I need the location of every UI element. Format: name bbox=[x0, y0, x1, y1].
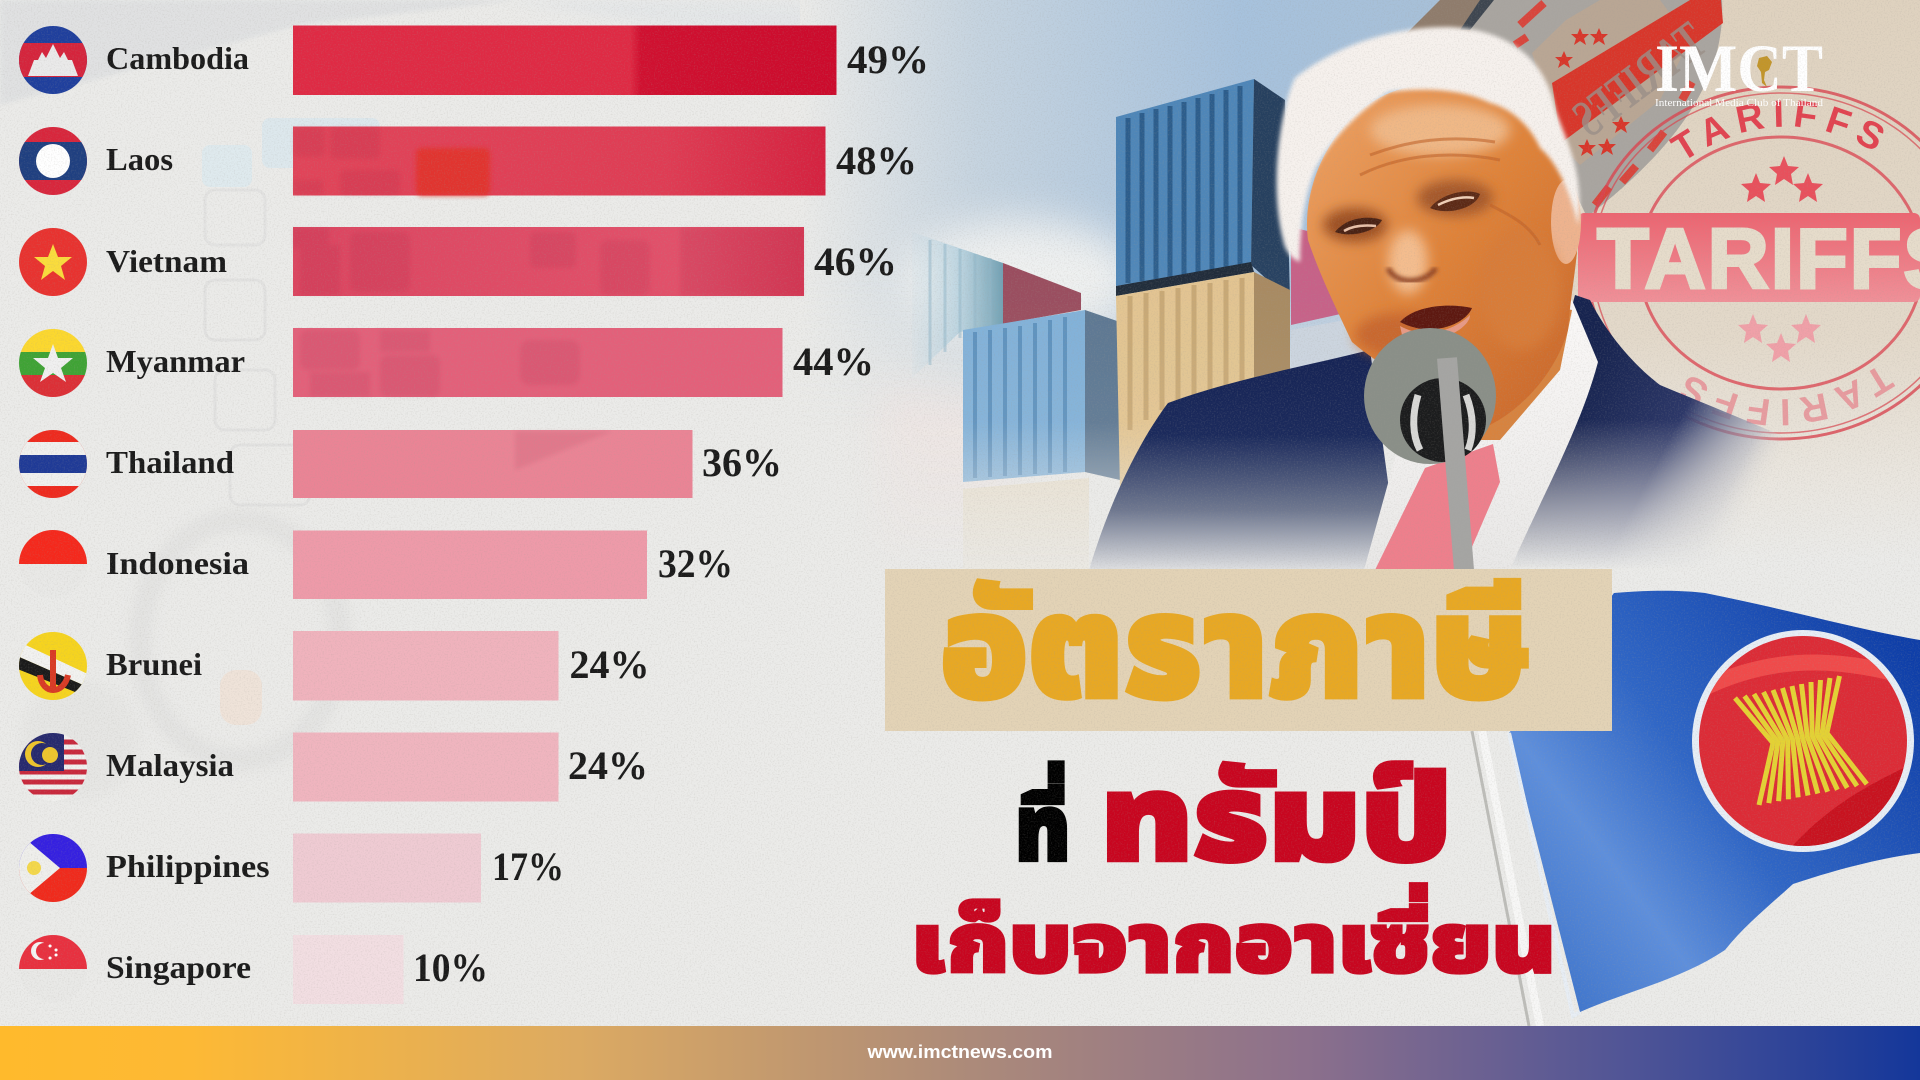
row: Cambodia bbox=[19, 26, 929, 94]
bar: Thailand 36% bbox=[293, 430, 692, 498]
row: Indonesia: Indonesia bbox=[106, 545, 249, 581]
bar: Brunei 24% bbox=[293, 631, 558, 700]
row: Vietnam bbox=[19, 228, 897, 296]
stamp stars bbox=[1555, 28, 1630, 156]
flag pole bbox=[1472, 731, 1540, 1026]
neck bbox=[1360, 290, 1572, 440]
row: Brunei: 24% bbox=[570, 642, 650, 687]
logo Thailand map icon bbox=[1757, 56, 1772, 87]
row: Vietnam: 46% bbox=[814, 239, 897, 284]
bar: Myanmar 44% bbox=[293, 328, 782, 397]
headline line 3: เก็บจากอาเซี่ยน bbox=[911, 883, 1556, 990]
bar: Singapore 10% bbox=[293, 935, 404, 1004]
forehead wrinkles bbox=[1360, 139, 1540, 245]
row: Laos: 48% bbox=[836, 138, 917, 183]
microphone bbox=[1364, 328, 1496, 570]
row: Myanmar: Myanmar bbox=[106, 343, 245, 379]
headline line 2 bbox=[1015, 750, 1452, 886]
bar: Indonesia 32% bbox=[293, 530, 647, 599]
row: Philippines bbox=[15, 830, 564, 906]
row: Indonesia: 32% bbox=[658, 541, 733, 586]
pink container behind bbox=[1291, 229, 1339, 325]
row: Myanmar: 44% bbox=[793, 339, 874, 384]
row: Thailand bbox=[19, 430, 782, 498]
footer bar bbox=[0, 1026, 1920, 1080]
lower lip bbox=[1400, 315, 1470, 340]
row: Thailand: Thailand bbox=[106, 444, 234, 480]
headline black word: ที่ bbox=[1015, 762, 1070, 880]
row: Malaysia: Malaysia bbox=[106, 747, 234, 783]
row: Philippines: 17% bbox=[492, 844, 564, 889]
calculator keys showing through bars bbox=[293, 127, 804, 470]
bar: Malaysia 24% bbox=[293, 732, 558, 802]
headline word 1: อัตราภาษี bbox=[940, 565, 1531, 728]
ear bbox=[1551, 180, 1581, 264]
red arc letters bbox=[1515, 3, 1692, 205]
pale grey container behind bbox=[1291, 320, 1348, 334]
cream container under light blue bbox=[963, 478, 1089, 570]
row: Malaysia: 24% bbox=[568, 743, 648, 788]
row: Myanmar bbox=[19, 329, 874, 399]
rice stalks bbox=[1735, 676, 1867, 805]
pale pink faded area bbox=[880, 385, 1010, 560]
flag: Brunei bbox=[15, 632, 90, 700]
flag: Laos bbox=[19, 127, 87, 195]
row: Singapore bbox=[19, 935, 488, 1003]
stamp band bbox=[1578, 213, 1920, 302]
maroon container bbox=[1003, 263, 1081, 324]
hair bbox=[1277, 27, 1579, 262]
faded calculator and banknote background bbox=[0, 0, 960, 800]
bar: Vietnam 46% bbox=[293, 227, 804, 296]
logo wordmark: IMCT bbox=[1655, 30, 1823, 106]
row: Indonesia bbox=[19, 530, 733, 598]
stamp reversed arc text: TARIFFS bbox=[1680, 368, 1896, 426]
suit jacket left bbox=[1089, 350, 1400, 570]
bar: Laos 48% bbox=[293, 126, 826, 196]
stamp arc text: TARIFFS bbox=[1668, 100, 1884, 158]
flag: Myanmar bbox=[19, 329, 87, 399]
sky behind containers bbox=[835, 0, 1440, 386]
footer url: www.imctnews.com bbox=[866, 1042, 1052, 1062]
left eye bbox=[1335, 218, 1382, 234]
country rows bbox=[15, 26, 929, 1003]
nose shadow bbox=[1388, 268, 1436, 281]
row: Thailand: 36% bbox=[702, 440, 782, 485]
bar chart bbox=[293, 26, 836, 1004]
flag: Philippines bbox=[15, 830, 87, 906]
row: Singapore: 10% bbox=[413, 945, 488, 990]
row: Laos bbox=[19, 127, 917, 195]
flag: Thailand bbox=[19, 430, 87, 498]
tariffs rubber stamp bbox=[1578, 86, 1920, 440]
kraft paper backdrop for stamps bbox=[1480, 0, 1920, 560]
wooden handle bbox=[1400, 0, 1500, 40]
red band bbox=[1552, 0, 1723, 143]
metal stamp block bbox=[1400, 0, 1723, 217]
necktie bbox=[1375, 444, 1500, 570]
red calculator key bbox=[416, 148, 490, 196]
suit jacket right bbox=[1513, 295, 1786, 564]
right eye bbox=[1430, 192, 1480, 211]
bar: Philippines 17% bbox=[293, 834, 481, 902]
row: Philippines: Philippines bbox=[106, 848, 270, 884]
president figure bbox=[1089, 27, 1815, 575]
row: Malaysia bbox=[19, 733, 648, 801]
pale teal container bbox=[918, 236, 1003, 370]
metal ring bbox=[1470, 0, 1722, 217]
flag emblem bbox=[1692, 630, 1920, 860]
tan inner face bbox=[1532, 0, 1690, 165]
blue main container bbox=[1116, 79, 1290, 300]
logo tagline: International Media Club of Thailand bbox=[1655, 97, 1823, 109]
row: Cambodia: 49% bbox=[847, 37, 929, 82]
tan container bbox=[1116, 272, 1290, 490]
row: Brunei bbox=[15, 632, 650, 700]
IMCT logo bbox=[1655, 30, 1823, 109]
face bbox=[1307, 83, 1578, 425]
stack of shipping containers bbox=[918, 79, 1348, 546]
row: Cambodia: Cambodia bbox=[106, 40, 249, 76]
mouth bbox=[1400, 306, 1472, 329]
ASEAN flag bbox=[1509, 591, 1920, 1016]
flag: Singapore bbox=[19, 935, 87, 1003]
row: Vietnam: Vietnam bbox=[106, 243, 227, 279]
row: Brunei: Brunei bbox=[106, 646, 202, 682]
light blue container bbox=[963, 310, 1120, 482]
bar: Cambodia 49% bbox=[293, 26, 836, 95]
row: Laos: Laos bbox=[106, 141, 173, 177]
flag: Cambodia bbox=[19, 26, 87, 94]
flag: Malaysia bbox=[19, 733, 87, 801]
flag: Vietnam bbox=[19, 228, 87, 296]
shirt bbox=[1364, 300, 1598, 570]
mirrored band word: TARIFFS bbox=[1561, 10, 1717, 148]
face shading bbox=[1323, 104, 1560, 357]
row: Singapore: Singapore bbox=[106, 949, 251, 985]
headline panel bbox=[885, 565, 1612, 731]
flag: Indonesia bbox=[19, 530, 87, 598]
stamp stars bbox=[1741, 156, 1823, 202]
headline red name: ทรัมป์ bbox=[1100, 750, 1452, 886]
